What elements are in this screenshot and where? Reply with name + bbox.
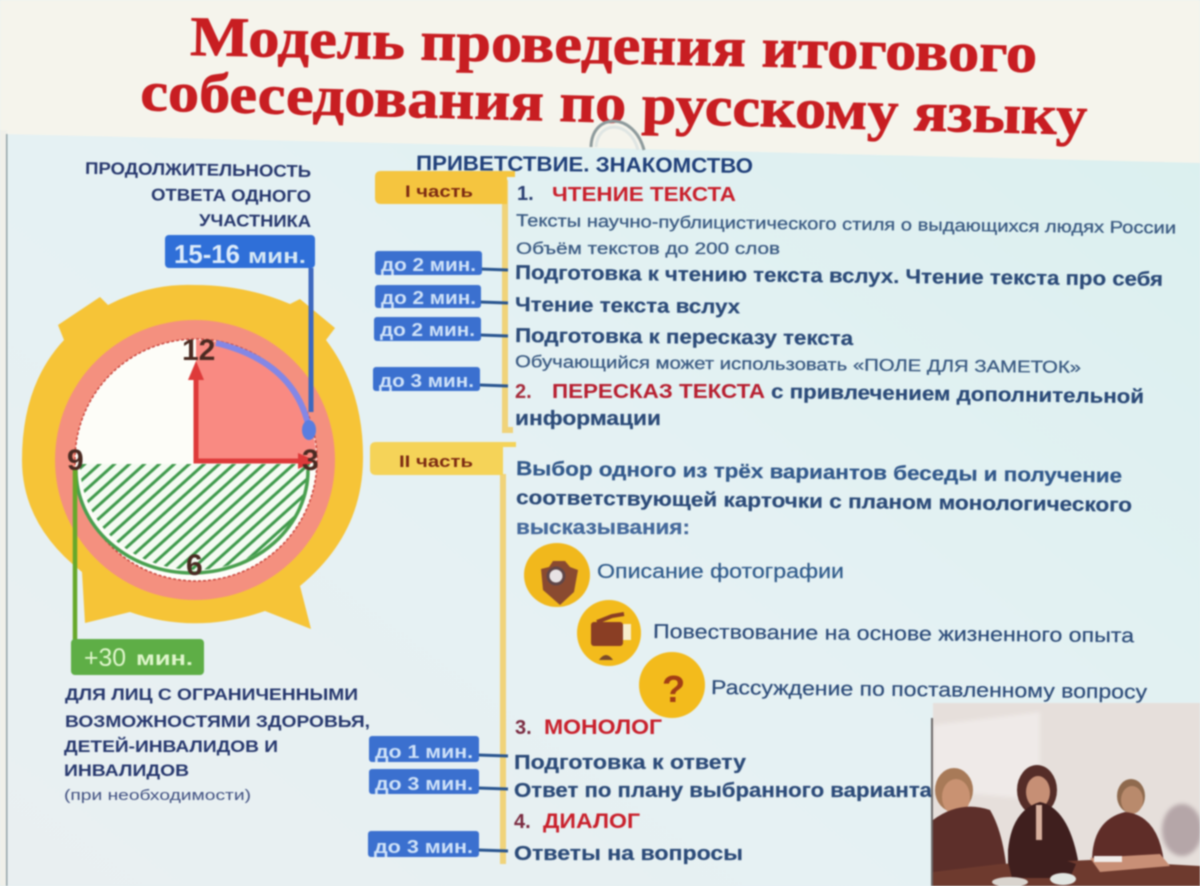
icon: question mark: ? [662, 669, 685, 711]
blue arc [216, 343, 316, 440]
section: dialogue: 4. [514, 811, 531, 833]
section: reading: ЧТЕНИЕ ТЕКСТА [552, 184, 736, 206]
tab: part II: II часть [399, 452, 473, 471]
badge: up to 3 min dialogue: до 3 мин. [374, 837, 473, 857]
heading: greeting: ПРИВЕТСТВИЕ. ЗНАКОМСТВО [416, 152, 753, 178]
section: part II intro: Выбор одного из трёх вариантов беседы и получение [516, 458, 1122, 487]
badge: up to 3 min monologue [369, 769, 508, 794]
text: people with disabilities: (при необходимости) [64, 787, 251, 804]
clock numbers: 3 [302, 444, 319, 477]
badge: 15-16 min: 15-16 [174, 239, 240, 269]
person left [933, 768, 1008, 886]
badge: up to 2 min retelling prep: до 2 мин. [380, 320, 475, 340]
time badges [368, 251, 508, 857]
text: people with disabilities: ДЕТЕЙ-ИНВАЛИДОВ И [64, 737, 278, 756]
section: retelling [515, 381, 1144, 430]
section: retelling: 2. [515, 381, 532, 403]
hatched half sector [80, 464, 310, 570]
heading: duration of one answer: УЧАСТНИКА [199, 211, 311, 231]
clock numbers: 9 [67, 444, 84, 477]
title: собеседования по русскому языку [140, 61, 1088, 148]
badge: 15-16 min [165, 235, 315, 412]
badge: +30 min: мин. [136, 649, 193, 670]
timeline spine [503, 180, 513, 864]
icon: video camera [577, 600, 641, 666]
section: monologue: Ответ по плану выбранного варианта [514, 780, 933, 802]
badge: +30 min [71, 470, 204, 675]
clock numbers: 6 [186, 549, 203, 582]
video inset: three participants [931, 703, 1200, 886]
title [140, 6, 1088, 148]
icon: alarm clock [22, 285, 363, 629]
text: people with disabilities: ДЛЯ ЛИЦ С ОГРАНИЧЕННЫМИ [65, 685, 358, 704]
section: reading: Тексты научно-публицистического стиля о выдающихся людях России [516, 211, 1176, 237]
person middle [1008, 765, 1078, 868]
section: retelling: информации [515, 408, 661, 430]
section: monologue: 3. [515, 717, 532, 739]
heading: duration of one answer: ОТВЕТА ОДНОГО [151, 185, 311, 206]
badge: up to 2 min retelling prep [374, 317, 508, 341]
icon: photo camera [524, 543, 590, 607]
section: reading: Подготовка к пересказу текста [515, 325, 854, 350]
section: part II intro [516, 458, 1132, 539]
decorative arc under title [591, 121, 644, 150]
badge: up to 2 min reading aloud: до 2 мин. [381, 288, 476, 308]
clock numbers [67, 334, 319, 582]
tab: part I [375, 171, 515, 204]
green arc [76, 470, 308, 573]
section: reading: Обучающийся может использовать «ПОЛЕ ДЛЯ ЗАМЕТОК» [515, 352, 1081, 377]
clock body [22, 285, 363, 629]
red quarter sector [196, 340, 316, 460]
section: reading: 1. [517, 183, 534, 205]
title: Модель проведения итогового [190, 6, 1038, 85]
section: monologue: Подготовка к ответу [514, 752, 747, 774]
text: reasoning: Рассуждение по поставленному вопросу [711, 677, 1147, 704]
clock hands [188, 361, 316, 469]
section: retelling: с привлечением дополнительной [771, 381, 1144, 408]
text: people with disabilities: ВОЗМОЖНОСТЯМИ ЗДОРОВЬЯ, [65, 712, 370, 731]
badge: +30 min: +30 [84, 644, 126, 672]
background flowers [1162, 804, 1200, 856]
table [933, 854, 1200, 886]
section: retelling: ПЕРЕСКАЗ ТЕКСТА [552, 381, 765, 403]
tab: part II [370, 442, 516, 475]
section: dialogue: ДИАЛОГ [543, 810, 640, 833]
section: part II intro: соответствующей карточки с планом монологического [516, 487, 1132, 517]
badge: up to 3 min retelling: до 3 мин. [379, 371, 474, 391]
badge: up to 1 min monologue prep [369, 736, 508, 762]
badge: up to 1 min monologue prep: до 1 мин. [375, 742, 473, 762]
badge: up to 2 min reading aloud [375, 285, 508, 308]
section: reading: Объём текстов до 200 слов [516, 239, 780, 258]
badge: 15-16 min: мин. [248, 246, 306, 268]
text: life-experience narrative: Повествование на основе жизненного опыта [653, 621, 1135, 647]
section: dialogue [514, 810, 743, 865]
section: dialogue: Ответы на вопросы [514, 843, 743, 865]
badge: up to 3 min retelling [373, 367, 508, 391]
badge: up to 2 min reading prep [375, 251, 508, 275]
section: reading: Подготовка к чтению текста вслух. Чтение текста про себя [515, 262, 1163, 291]
badge: up to 3 min monologue: до 3 мин. [375, 774, 473, 794]
text: photo description: Описание фотографии [597, 561, 844, 583]
section: reading: Чтение текста вслух [515, 294, 740, 318]
badge: up to 3 min dialogue [368, 831, 508, 857]
text: people with disabilities: ИНВАЛИДОВ [64, 761, 189, 780]
icon: question mark [639, 652, 705, 718]
heading: duration of one answer [85, 159, 311, 231]
clock numbers: 12 [182, 334, 215, 367]
section: part II intro: высказывания: [516, 517, 690, 539]
section: monologue: МОНОЛОГ [544, 716, 662, 739]
person right [1092, 779, 1164, 862]
section: monologue [514, 716, 933, 802]
heading: duration of one answer: ПРОДОЛЖИТЕЛЬНОСТЬ [85, 159, 311, 181]
tab: part I: I часть [405, 182, 473, 201]
badge: up to 2 min reading prep: до 2 мин. [381, 255, 476, 275]
text: people with disabilities [64, 685, 370, 804]
section: reading [515, 183, 1176, 377]
